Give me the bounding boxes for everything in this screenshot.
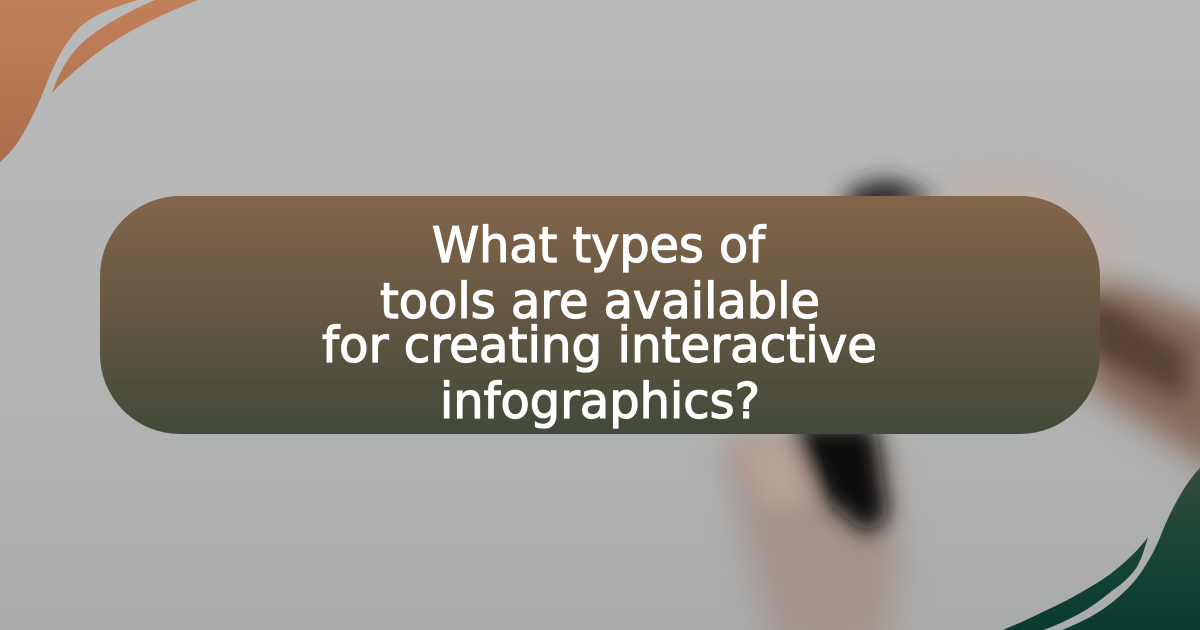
title text: tools are available [380,273,820,330]
decoration: top-left orange wave [0,0,198,162]
title text: for creating interactive [322,317,877,374]
title text: infographics? [440,373,760,430]
title banner [100,196,1100,434]
title text: What types of [432,217,767,274]
title text [322,217,877,430]
decoration: bottom-right green wave [1003,468,1200,630]
banner background [100,196,1100,434]
